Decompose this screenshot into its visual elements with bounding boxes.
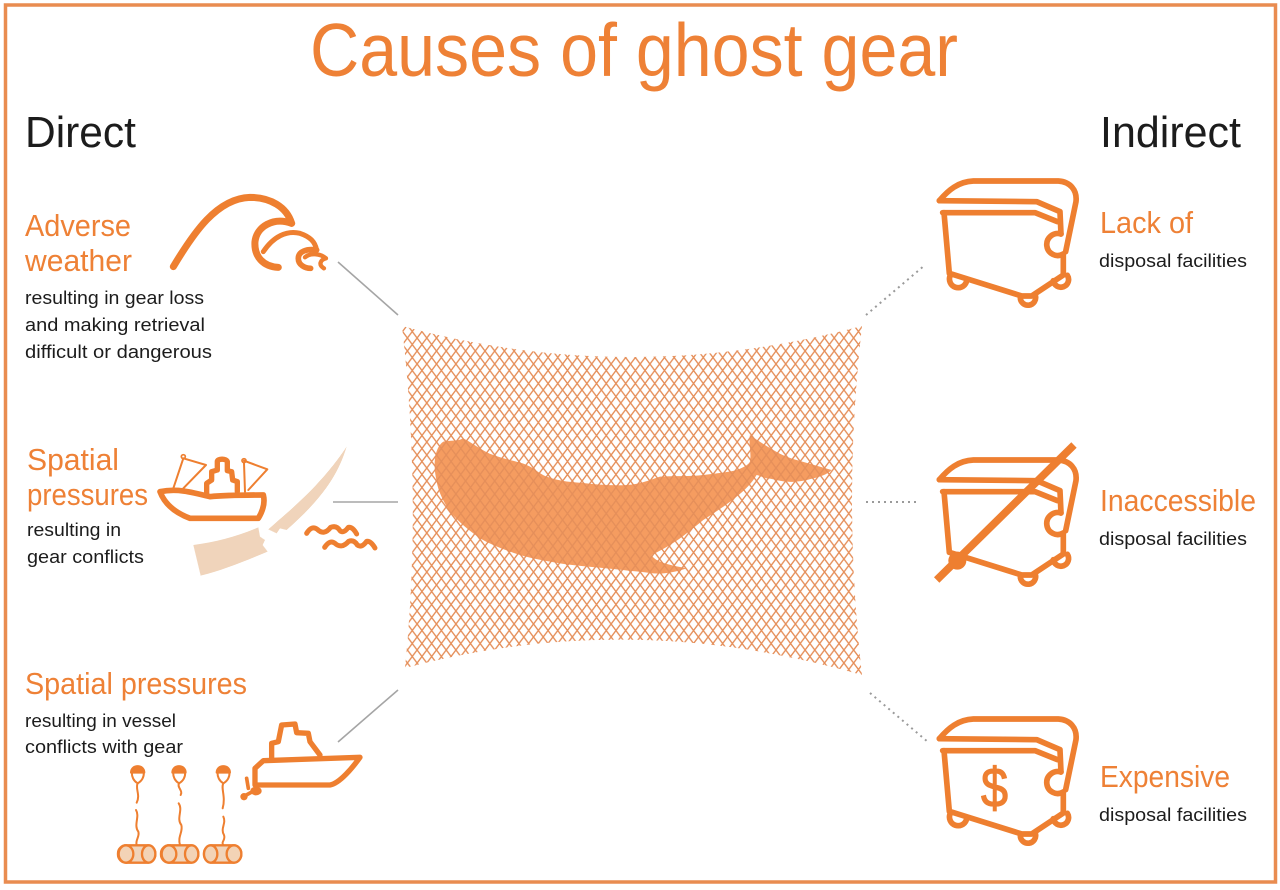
text block: lack of	[1099, 205, 1247, 271]
heading: indirect: Indirect	[1100, 108, 1241, 157]
icon: fishing boat	[160, 455, 267, 518]
text block: adverse weather: resulting in gear loss	[25, 288, 204, 308]
text block: lack of: disposal facilities	[1099, 251, 1247, 271]
text block: expensive: disposal facilities	[1099, 805, 1247, 825]
icon: torn net	[193, 447, 347, 576]
text block: lack of: Lack of	[1100, 205, 1193, 240]
text block: inaccessible: disposal facilities	[1099, 529, 1247, 549]
text block: spatial pressures gear conflicts: pressures	[27, 477, 148, 512]
icon: vessel with propeller	[240, 724, 360, 800]
icon: water ripples	[307, 527, 375, 548]
text block: spatial pressures gear conflicts: Spatial	[27, 442, 119, 477]
text block: inaccessible	[1099, 483, 1256, 549]
connector: inaccessible facilities	[866, 501, 916, 503]
whale silhouette	[435, 435, 832, 574]
icon: crossed out bin	[937, 445, 1076, 584]
text block: spatial pressures vessel conflicts: Spatial pressures	[25, 666, 247, 701]
connector: adverse weather to net	[338, 262, 398, 315]
text block: spatial pressures vessel conflicts	[25, 666, 247, 757]
text block: spatial pressures vessel conflicts: conflicts with gear	[25, 737, 183, 757]
connector: vessel to net	[338, 690, 398, 742]
icon: bin with dollar sign: $	[981, 756, 1008, 819]
icon: bin with dollar sign	[939, 719, 1076, 843]
text block: spatial pressures gear conflicts	[27, 442, 148, 567]
fishing net	[395, 320, 870, 680]
text block: spatial pressures vessel conflicts: resulting in vessel	[25, 711, 176, 731]
title: Causes of ghost gear	[310, 8, 958, 92]
heading: direct: Direct	[25, 108, 136, 157]
connector: spatial pressures to net	[333, 501, 398, 503]
text block: adverse weather: difficult or dangerous	[25, 342, 212, 362]
icon: buoys and gear	[118, 766, 241, 863]
text block: inaccessible: Inaccessible	[1100, 483, 1256, 518]
text block: adverse weather: weather	[24, 243, 132, 278]
connector: lack of facilities	[866, 265, 925, 315]
connector: expensive facilities	[870, 693, 928, 742]
text block: spatial pressures gear conflicts: resulting in	[27, 520, 121, 540]
icon: wave	[173, 197, 326, 268]
text block: adverse weather: and making retrieval	[25, 315, 205, 335]
text block: adverse weather	[24, 208, 212, 362]
text block: expensive	[1099, 759, 1247, 825]
text block: adverse weather: Adverse	[25, 208, 131, 243]
icon: bin	[939, 181, 1076, 305]
text block: spatial pressures gear conflicts: gear conflicts	[27, 547, 144, 567]
text block: expensive: Expensive	[1100, 759, 1230, 794]
